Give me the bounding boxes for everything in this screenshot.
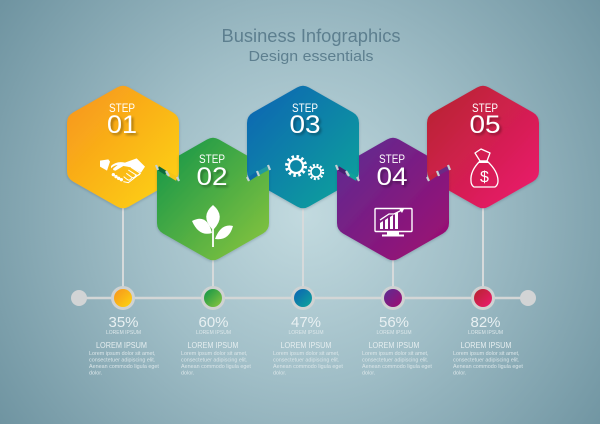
panel: step 03 [247, 86, 359, 208]
panel: step 02 [156, 138, 270, 260]
icon: plant [192, 205, 233, 247]
text block: step 02: dolor. [181, 370, 194, 376]
panel: step 05: 05 [470, 111, 500, 139]
text block: step 05: 82% [470, 314, 500, 331]
text block: step 04: Aenean commodo ligula eget [362, 364, 432, 370]
text block: step 05: Aenean commodo ligula eget [453, 364, 523, 370]
text block: step 04: LOREM IPSUM [376, 330, 412, 336]
text block: step 03: 47% [291, 314, 321, 331]
icon: gears [286, 156, 323, 179]
text block: step 02: Aenean commodo ligula eget [181, 364, 251, 370]
icon: monitor chart [375, 208, 412, 236]
text block: step 01 [89, 314, 159, 376]
text block: step 03: LOREM IPSUM [288, 330, 324, 336]
text block: step 03: Lorem ipsum dolor sit amet, [273, 351, 340, 357]
text block: step 03: Aenean commodo ligula eget [273, 364, 343, 370]
icon: handshake [100, 158, 145, 183]
text block: step 03: consectetuer adipiscing elit. [273, 358, 339, 364]
text block: step 01: Lorem ipsum dolor sit amet, [89, 351, 156, 357]
text block: step 02: LOREM IPSUM [188, 341, 239, 350]
text block: step 03: LOREM IPSUM [280, 341, 332, 350]
text block: step 05: Lorem ipsum dolor sit amet, [453, 351, 520, 357]
panel: step 04: 04 [376, 163, 408, 191]
text block: step 01: 35% [108, 314, 138, 331]
text block: step 02: 60% [198, 314, 228, 331]
text block: step 01: consectetuer adipiscing elit. [89, 358, 155, 364]
text block: step 04: LOREM IPSUM [368, 341, 420, 350]
text block: step 04: 56% [379, 314, 409, 331]
text block: step 03 [273, 314, 343, 376]
panel: step 05 [427, 86, 539, 208]
text block: step 03: dolor. [273, 370, 286, 376]
text block: step 04: Lorem ipsum dolor sit amet, [362, 351, 429, 357]
text block: step 05: dolor. [453, 370, 466, 376]
text block: step 04: dolor. [362, 370, 375, 376]
text block: step 01: Aenean commodo ligula eget [89, 364, 159, 370]
text block: step 02: consectetuer adipiscing elit. [181, 358, 247, 364]
text block: step 02: LOREM IPSUM [196, 330, 231, 336]
icon: money bag: $ [480, 169, 489, 186]
text block: step 05: LOREM IPSUM [468, 330, 503, 336]
text block: step 04 [362, 314, 432, 376]
panel: step 03: 03 [290, 111, 320, 139]
puzzle tabs [336, 165, 450, 181]
text block: step 04: consectetuer adipiscing elit. [362, 358, 428, 364]
panel: step 01 [67, 86, 179, 208]
title [222, 26, 400, 65]
text block: step 02 [181, 314, 251, 376]
text block: step 01: dolor. [89, 370, 102, 376]
panel: step 04: STEP [379, 152, 405, 166]
text block: step 05 [453, 314, 523, 376]
text block: step 01: LOREM IPSUM [96, 341, 147, 350]
panel: step 03: STEP [292, 101, 318, 115]
panel: step 04 [336, 138, 450, 260]
panel: step 05: STEP [472, 101, 498, 115]
panel: step 01: STEP [109, 101, 135, 115]
text block: step 02: Lorem ipsum dolor sit amet, [181, 351, 248, 357]
title: Design essentials [248, 48, 374, 65]
panel: step 02: 02 [196, 163, 228, 191]
timeline [71, 205, 536, 310]
text block: step 01: LOREM IPSUM [106, 330, 141, 336]
text block: step 05: LOREM IPSUM [460, 341, 512, 350]
panel: step 01: 01 [107, 111, 137, 139]
puzzle tabs [156, 165, 270, 181]
text block: step 05: consectetuer adipiscing elit. [453, 358, 519, 364]
title: Business Infographics [222, 26, 400, 46]
panel: step 02: STEP [199, 152, 225, 166]
